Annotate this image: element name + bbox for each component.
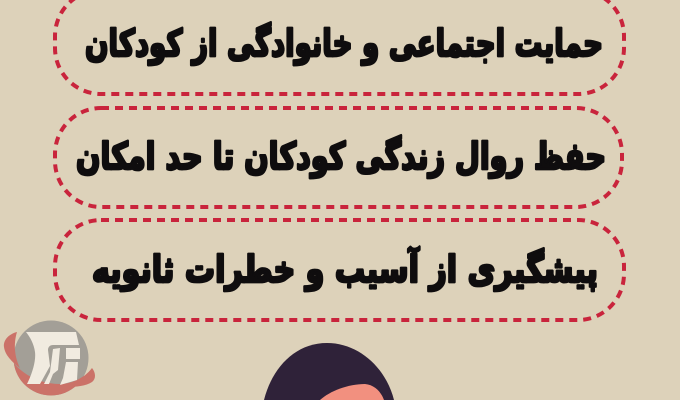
icon: publisher logo [4, 320, 95, 400]
panel: keeping children's lives normal [55, 108, 622, 207]
panel: preventing secondary harm [55, 220, 624, 320]
panel: social and family support [55, 0, 624, 94]
illustration: woman in dark headscarf [264, 343, 394, 400]
